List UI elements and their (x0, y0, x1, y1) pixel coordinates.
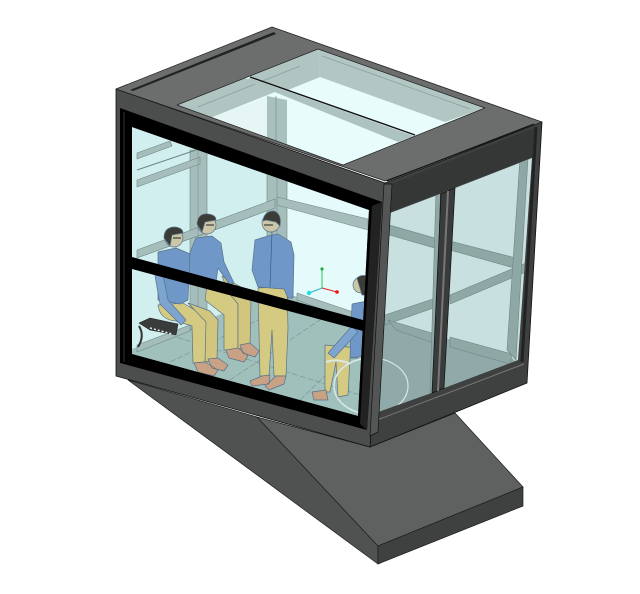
right pane frame edge (522, 127, 536, 362)
feet (226, 343, 259, 362)
front window interior (132, 127, 369, 416)
head (352, 278, 366, 294)
cabin right outer face (370, 122, 542, 447)
wheel seen through glass (382, 358, 409, 406)
torso (186, 236, 234, 285)
black chair (138, 318, 178, 347)
legs (325, 345, 358, 397)
floor (132, 291, 365, 420)
wall grab rail (137, 150, 196, 170)
arm (155, 270, 186, 325)
black middle transom (132, 257, 363, 331)
right bottom sill (377, 364, 524, 420)
black front window frame (120, 108, 382, 430)
right header band (390, 127, 536, 212)
torso (350, 301, 364, 358)
standing person (250, 211, 294, 390)
front frame left strip (123, 112, 125, 362)
concrete base (128, 380, 523, 564)
roof opening (177, 49, 485, 165)
roof front slot (387, 124, 534, 181)
back walls (132, 120, 277, 360)
head (262, 218, 280, 232)
pane background (380, 194, 440, 412)
roof surface (116, 27, 542, 181)
right window left pane (380, 194, 440, 412)
base ramp side (128, 380, 378, 564)
roof rear slot (130, 32, 276, 91)
front frame right strip (360, 202, 382, 430)
head (198, 220, 216, 234)
base plinth front (378, 487, 523, 564)
arm (328, 326, 358, 358)
jacket (252, 234, 294, 298)
pane background (444, 158, 532, 388)
pane floor (380, 324, 432, 412)
right centre mullion (432, 188, 455, 393)
cabin front outer face (116, 89, 385, 447)
wheelchair person (312, 275, 366, 413)
torso (158, 248, 190, 304)
legs (258, 286, 288, 376)
thighs and shins (205, 285, 238, 350)
right window right pane (444, 158, 532, 388)
foot (312, 390, 328, 400)
roof opening outline (177, 49, 485, 165)
base top face (257, 413, 523, 546)
feet (194, 358, 228, 376)
axis triad icon (307, 267, 339, 295)
roof (116, 27, 542, 181)
corner column (370, 184, 392, 436)
feet (250, 375, 286, 390)
thigh and shin (158, 303, 207, 363)
seated person 2 (186, 214, 259, 362)
head (164, 234, 184, 248)
seated person 1 (155, 227, 228, 376)
aluminium frame rails (137, 140, 368, 352)
wheel (333, 358, 361, 413)
pane floor (444, 338, 516, 390)
